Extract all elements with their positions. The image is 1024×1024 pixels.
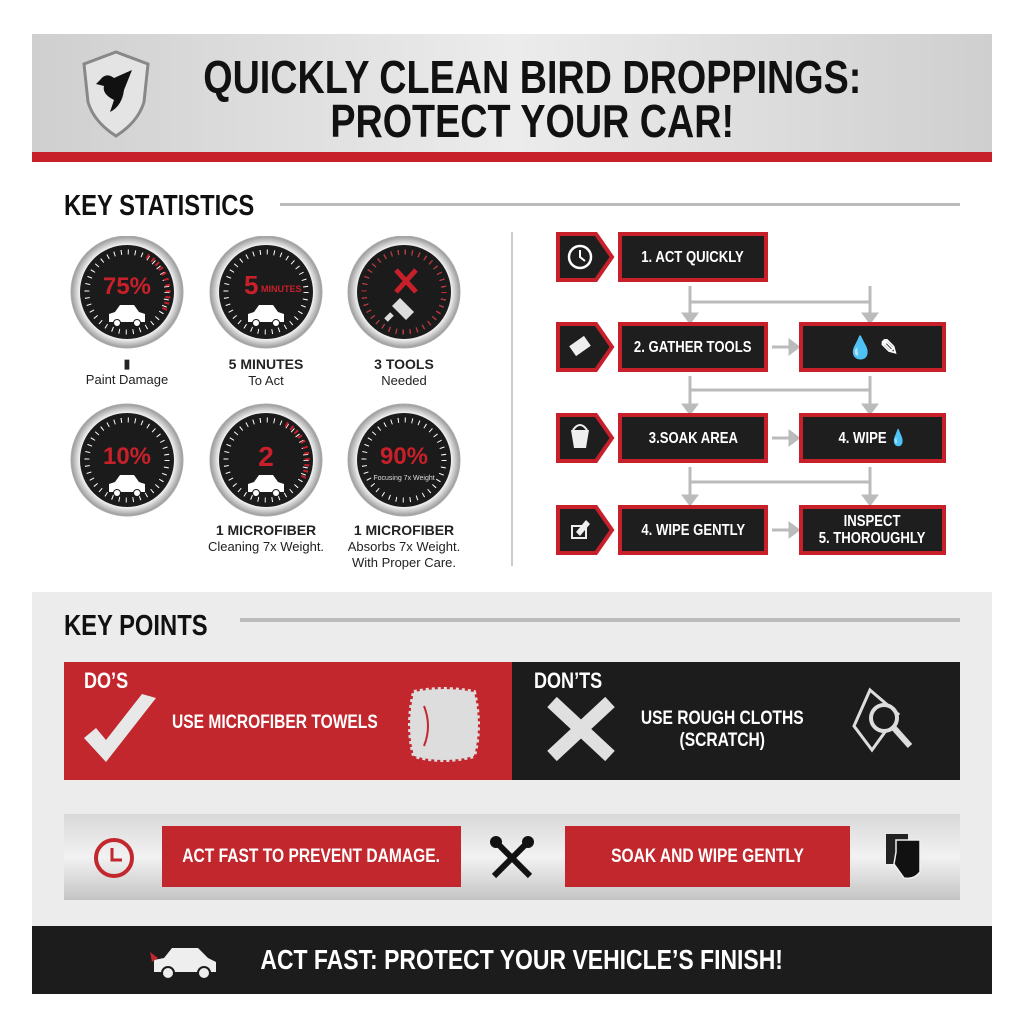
step 4: 4. WIPE 💧 xyxy=(838,430,907,446)
gauge 5 minutes: MINUTES xyxy=(261,284,302,294)
icon: clock xyxy=(94,838,134,878)
icon: bird shield xyxy=(82,50,150,138)
label 6: 1 MICROFIBER xyxy=(354,522,454,538)
gauge 5 minutes xyxy=(210,236,322,348)
gauge 90%: Focusing 7x Weight xyxy=(373,475,435,482)
gauge 3 tools xyxy=(348,236,460,348)
label 3: 3 TOOLS xyxy=(374,356,434,372)
label 6: Absorbs 7x Weight. xyxy=(348,539,460,554)
gauges xyxy=(70,236,460,570)
label 3 xyxy=(374,356,434,388)
label 5: Cleaning 7x Weight. xyxy=(208,539,324,554)
heading: key statistics: KEY STATISTICS xyxy=(64,190,254,222)
label 2: To Act xyxy=(248,373,284,388)
flowchart xyxy=(556,232,946,555)
do's panel: DO’S xyxy=(84,668,128,693)
label 3: Needed xyxy=(381,373,427,388)
gauge 10%: 10% xyxy=(103,443,151,470)
step 5: INSPECT xyxy=(844,513,901,530)
step 1: 1. ACT QUICKLY xyxy=(642,248,744,266)
label 1 xyxy=(86,356,168,387)
tip 1 xyxy=(162,826,461,887)
tools box: 💧 ✎ xyxy=(847,334,898,360)
key points panel xyxy=(32,592,992,928)
step 3 xyxy=(618,413,768,463)
do's panel xyxy=(64,662,512,780)
icon: tools xyxy=(490,836,534,878)
tip 2: SOAK AND WIPE GENTLY xyxy=(611,846,804,866)
step 2 xyxy=(618,322,768,372)
icon: hand cloth xyxy=(886,834,920,879)
tip 1: ACT FAST TO PREVENT DAMAGE. xyxy=(183,846,440,866)
gauge 5 minutes: 5 xyxy=(244,270,258,300)
step 4b: 4. WIPE GENTLY xyxy=(641,522,745,538)
gauge 2 xyxy=(210,404,322,516)
don'ts panel: DON’TS xyxy=(534,668,602,693)
title: QUICKLY CLEAN BIRD DROPPINGS: xyxy=(203,51,861,103)
footer banner xyxy=(32,926,992,994)
don'ts panel xyxy=(512,662,960,780)
footer text: ACT FAST: PROTECT YOUR VEHICLE’S FINISH! xyxy=(261,944,783,975)
gauge 90%: 90% xyxy=(380,443,428,470)
icon: car xyxy=(150,948,216,978)
label 5 xyxy=(208,522,324,554)
gauge 75%: 75% xyxy=(103,273,151,300)
title: PROTECT YOUR CAR! xyxy=(330,95,734,147)
header banner xyxy=(32,34,992,162)
don'ts panel: (SCRATCH) xyxy=(679,730,765,751)
label 2: 5 MINUTES xyxy=(229,356,303,372)
gauge 2: 2 xyxy=(258,441,274,472)
heading: key points: KEY POINTS xyxy=(64,610,208,642)
don'ts panel: USE ROUGH CLOTHS xyxy=(641,708,803,729)
label 6 xyxy=(348,522,460,570)
step 5: 5. THOROUGHLY xyxy=(819,530,926,547)
step 3: 3.SOAK AREA xyxy=(648,430,738,446)
label 1: ▮ xyxy=(123,356,131,371)
step 5 xyxy=(799,505,946,555)
step 1 xyxy=(618,232,768,282)
label 2 xyxy=(229,356,303,388)
title xyxy=(203,51,861,147)
step 4b xyxy=(618,505,768,555)
tip 2 xyxy=(565,826,850,887)
label 5: 1 MICROFIBER xyxy=(216,522,316,538)
gauge 75% xyxy=(71,236,183,348)
tools box xyxy=(799,322,946,372)
do's panel: USE MICROFIBER TOWELS xyxy=(172,712,378,733)
label 1: Paint Damage xyxy=(86,372,168,387)
label 6: With Proper Care. xyxy=(352,555,456,570)
step 2: 2. GATHER TOOLS xyxy=(634,338,752,356)
step 4 xyxy=(799,413,946,463)
tips strip xyxy=(64,814,960,900)
gauge 10% xyxy=(71,404,183,516)
gauge 90% xyxy=(348,404,460,516)
